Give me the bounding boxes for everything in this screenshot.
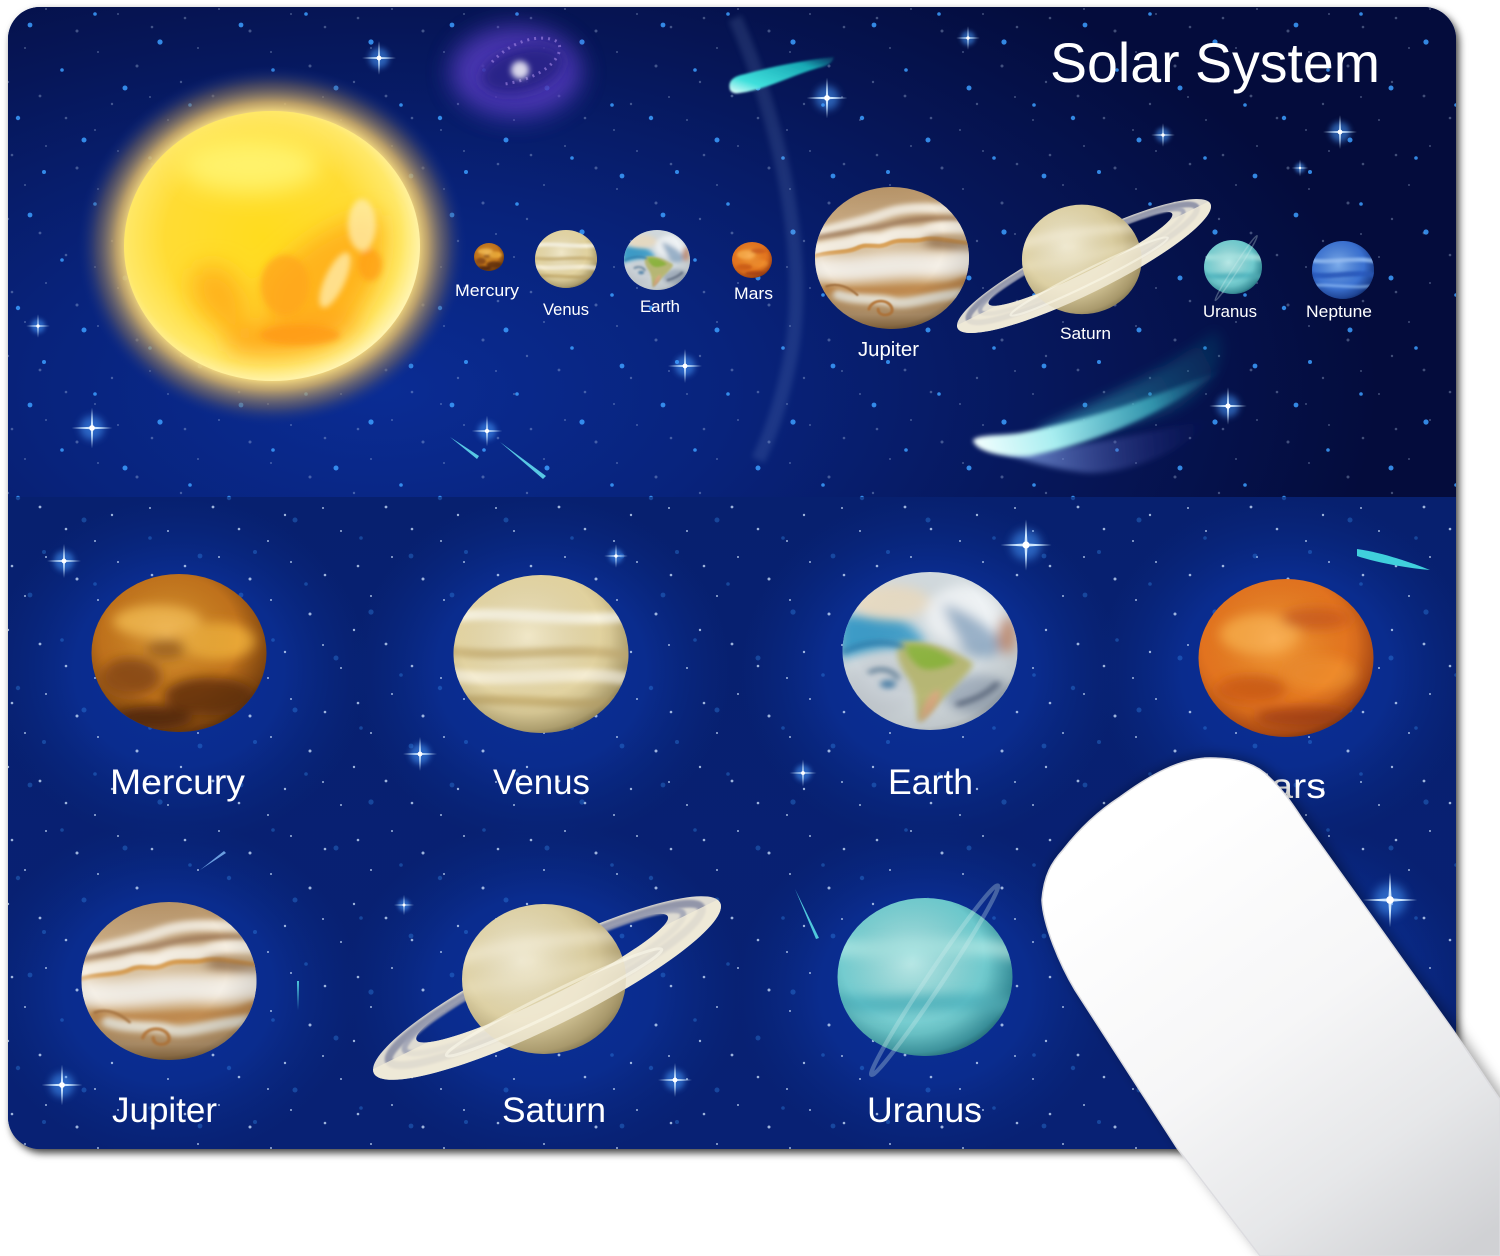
meteors — [200, 437, 1430, 1010]
planet: Venus — [445, 575, 637, 733]
panel: planet cards background — [0, 495, 1480, 1160]
comet: large — [973, 330, 1225, 473]
title: Solar System — [1050, 31, 1380, 94]
label: Mercury small: Mercury — [455, 281, 520, 300]
planet: Mercury — [92, 574, 266, 732]
galaxy — [450, 26, 582, 118]
label: Earth: Earth — [888, 763, 973, 802]
planet: Uranus — [829, 882, 1021, 1079]
label: Uranus: Uranus — [867, 1091, 982, 1130]
label: Venus: Venus — [493, 763, 590, 802]
label: Mars: Mars — [1238, 767, 1326, 806]
planet: Mars — [1198, 579, 1374, 737]
planet: Neptune small — [1309, 241, 1377, 299]
computer mouse — [1042, 758, 1500, 1256]
label: Earth small: Earth — [640, 297, 680, 316]
label: Uranus small: Uranus — [1203, 302, 1257, 321]
planet: Earth small — [622, 230, 690, 290]
planet: Uranus small — [1204, 235, 1262, 302]
sparkling stars — [26, 26, 1417, 1105]
planet: Jupiter — [77, 902, 261, 1060]
milky way arc — [735, 18, 796, 460]
planet: Mars small — [732, 242, 772, 278]
planet: Jupiter small — [811, 187, 973, 329]
planet: Saturn small — [957, 199, 1211, 333]
label: Mars small: Mars — [734, 284, 773, 303]
planet: Earth — [838, 572, 1018, 730]
planet: Venus small — [532, 230, 600, 288]
label: Saturn small: Saturn — [1060, 324, 1111, 343]
label: Jupiter: Jupiter — [112, 1091, 217, 1130]
panel: solar system overview background — [8, 7, 1456, 497]
label: Venus small: Venus — [543, 300, 589, 319]
planet: Saturn — [357, 869, 737, 1107]
sun — [77, 66, 467, 426]
label: Mercury: Mercury — [110, 763, 246, 802]
label: Neptune small: Neptune — [1306, 302, 1372, 321]
comet: top small — [729, 57, 834, 93]
planet: Mercury small — [474, 243, 504, 271]
label: Jupiter small: Jupiter — [858, 339, 919, 361]
label: Saturn: Saturn — [502, 1091, 606, 1130]
